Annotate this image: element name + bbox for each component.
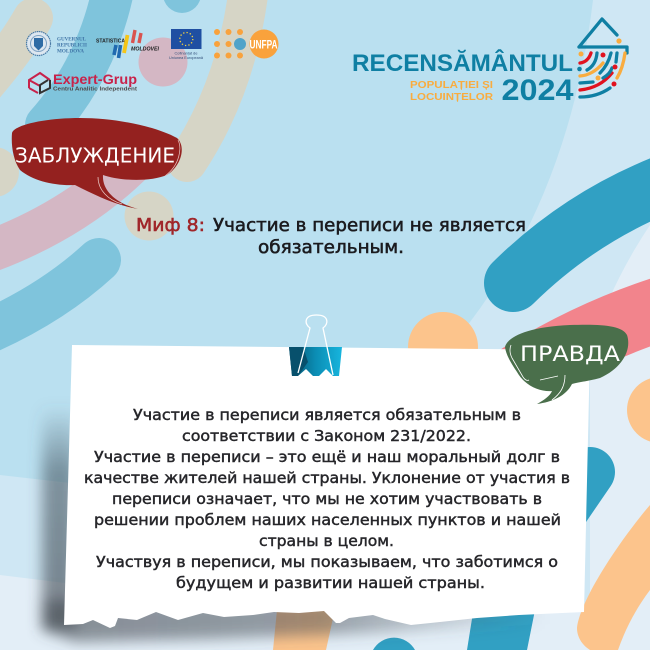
card body text (84, 406, 570, 592)
logo: government of Moldova: MOLDOVA (57, 50, 84, 54)
card body text: переписи означает, что мы не хотим участвовать в (112, 490, 542, 508)
logo: UNFPA: UNFPA (250, 40, 278, 52)
card body text: соответствии с Законом 231/2022. (182, 427, 471, 445)
logo: government of Moldova (26, 32, 87, 56)
census title (352, 49, 574, 107)
logo: Statistica Moldovei: STATISTICA (96, 38, 125, 44)
logo: European Union (169, 29, 203, 60)
card body text: решении проблем наших населенных пунктов и нашей (94, 511, 561, 529)
census title: 2024 (502, 74, 574, 107)
card body text: Участвуя в переписи, мы показываем, что заботимся о (96, 553, 558, 571)
speech bubble: truth (505, 325, 628, 404)
census title: LOCUINȚELOR (410, 91, 493, 103)
myth heading: Участие в переписи не является (213, 215, 526, 236)
card body text: Участие в переписи является обязательным в (133, 406, 521, 424)
card body text: Участие в переписи – это ещё и наш моральный долг в (94, 448, 560, 466)
census title: POPULAȚIEI ȘI (410, 79, 493, 91)
census title: RECENSĂMÂNTUL (352, 49, 573, 77)
logo: European Union: Uniunea Europeană (169, 56, 203, 60)
speech bubble: misconception: ЗАБЛУЖДЕНИЕ (15, 144, 175, 168)
card shadow (42, 405, 545, 642)
logo: Statistica Moldovei: MOLDOVEI (131, 46, 160, 52)
icon: census house logo (577, 19, 627, 97)
speech bubble: misconception (12, 118, 182, 209)
icon: binder clip (289, 315, 342, 376)
paper note card (64, 345, 590, 628)
logo: Expert-Grup: Expert-Grup (53, 72, 137, 87)
logo: Statistica Moldovei (96, 30, 160, 58)
logo: European Union: Cofinanțat de (174, 52, 198, 56)
card body text: будущем и развитии нашей страны. (176, 574, 485, 592)
myth heading: Миф 8: (136, 215, 205, 236)
logo: Expert-Grup (29, 72, 137, 93)
logo: government of Moldova: REPUBLICII (57, 44, 87, 48)
card body text: страны в целом. (259, 532, 394, 550)
logo: government of Moldova: GUVERNUL (57, 38, 87, 42)
myth heading: обязательным. (258, 237, 404, 258)
speech bubble: truth: ПРАВДА (520, 342, 620, 367)
logo: UNFPA (214, 29, 278, 58)
card body text: качестве жителей нашей страны. Уклонение от участия в (84, 469, 570, 487)
myth heading (136, 215, 526, 258)
logo: Expert-Grup: Centru Analitic Independent (53, 86, 137, 92)
